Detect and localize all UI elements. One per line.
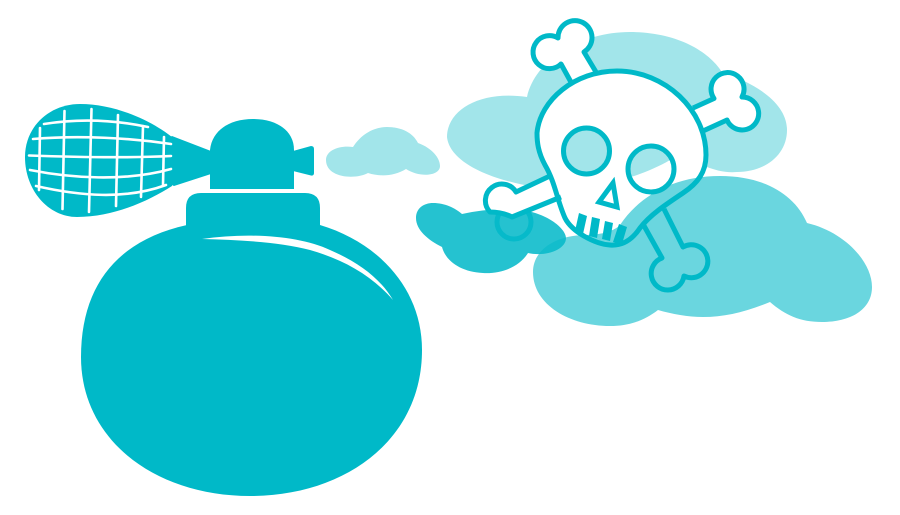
icon: skull and crossbones front layer: [485, 71, 708, 290]
atomizer cap: [210, 119, 294, 189]
nose: [599, 183, 617, 207]
icon: skull and crossbones back layer: [533, 21, 759, 245]
large mid cloud: [533, 176, 872, 326]
dark spray cloud: [416, 203, 566, 273]
left bone: [485, 175, 561, 217]
icon: perfume bottle: [25, 104, 422, 496]
bottle body: [81, 225, 422, 496]
right bone: [693, 73, 759, 131]
lower bone lobe under dark cloud: [497, 205, 531, 239]
skull outline: [537, 71, 706, 245]
left eye socket: [564, 128, 610, 174]
spray nozzle: [293, 146, 314, 176]
teeth: [575, 213, 627, 244]
small spray cloud: [326, 127, 440, 177]
atomizer tube: [160, 136, 211, 186]
bottle highlight: [202, 236, 393, 300]
large light cloud: [447, 32, 787, 190]
atomizer bulb: [25, 104, 172, 217]
bulb netting: [29, 109, 171, 212]
skull fill with eye sockets: [537, 71, 706, 245]
bottom bone: [643, 209, 708, 290]
right eye socket: [628, 146, 674, 192]
top bone: [533, 21, 596, 84]
bottle collar: [186, 193, 320, 228]
